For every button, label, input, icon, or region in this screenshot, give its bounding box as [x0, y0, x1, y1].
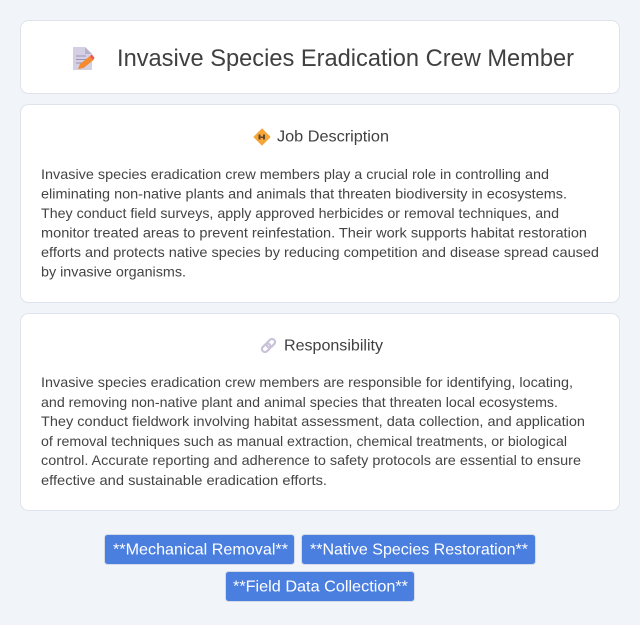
tag: field data collection: **Field Data Collection**	[233, 578, 408, 596]
text block: responsibility: They conduct fieldwork involving habitat assessment, data collection, and application	[41, 413, 585, 429]
icon: document with pencil	[73, 47, 94, 70]
tag: field data collection	[226, 572, 414, 602]
panel: title	[20, 20, 620, 94]
text block: job description: eliminating non-native plants and animals that threaten biodiversity in ecosystems.	[41, 186, 567, 202]
tag: native species restoration	[302, 534, 536, 564]
text block: job description: Invasive species eradication crew members play a crucial role in controlling and	[41, 166, 549, 182]
text block: responsibility: of removal techniques such as manual extraction, chemical treatments, or biological	[41, 433, 567, 449]
tag: mechanical removal: **Mechanical Removal**	[113, 542, 288, 558]
text block: job description: They conduct field surveys, apply approved herbicides or removal techniques, and	[41, 205, 559, 221]
icon: diamond road sign	[254, 129, 270, 145]
text block: responsibility: Invasive species eradication crew members are responsible for identifying, locating,	[41, 374, 573, 390]
text block: job description: efforts and protects native species by reducing competition and disease spread caused	[41, 244, 599, 260]
panel: job description	[20, 104, 620, 302]
text block: responsibility	[41, 374, 585, 488]
icon: chain link	[261, 338, 276, 353]
text block: responsibility: control. Accurate reporting and adherence to safety protocols are essential to ensure	[41, 452, 581, 468]
heading: responsibility: Responsibility	[284, 338, 383, 354]
text block: job description	[41, 166, 599, 280]
text block: responsibility: effective and sustainable eradication efforts.	[41, 472, 327, 488]
panel: responsibility	[20, 314, 620, 510]
text block: responsibility: and removing non-native plant and animal species that threaten local ecosystems.	[41, 394, 558, 410]
tag: mechanical removal	[104, 534, 294, 564]
text block: job description: by invasive organisms.	[41, 264, 186, 280]
tag: native species restoration: **Native Species Restoration**	[310, 542, 528, 558]
heading: job description: Job Description	[277, 128, 389, 146]
title text: Invasive Species Eradication Crew Member	[117, 45, 574, 72]
text block: job description: monitor treated areas to prevent reinfestation. Their work supports habitat restoration	[41, 224, 587, 240]
